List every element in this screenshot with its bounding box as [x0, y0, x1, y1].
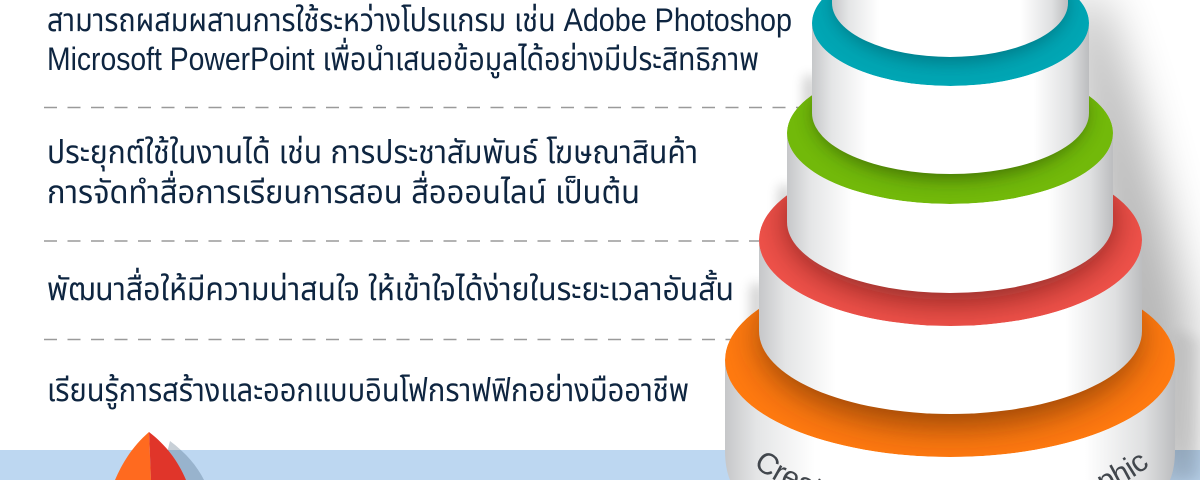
benefit line 4: การจัดทำสื่อการเรียนการสอน สื่อออนไลน์ เป็นต้น	[47, 170, 640, 210]
tier 5 label	[758, 453, 1148, 480]
benefit line 1: สามารถผสมผสานการใช้ระหว่างโปรแกรม เช่น Adobe Photoshop	[47, 2, 792, 38]
benefit line 2: Microsoft PowerPoint เพื่อนำเสนอข้อมูลได้อย่างมีประสิทธิภาพ	[47, 37, 759, 79]
red ring	[759, 194, 1142, 326]
benefit line 3: ประยุกต์ใช้ในงานได้ เช่น การประชาสัมพันธ์ โฆษณาสินค้า	[47, 134, 698, 171]
orange ring	[725, 308, 1175, 457]
tier 3 wall	[787, 133, 1113, 293]
stacked cylinder diagram	[725, 0, 1200, 480]
benefit line 5: พัฒนาสื่อให้มีความน่าสนใจ ให้เข้าใจได้ง่ายในระยะเวลาอันสั้น	[47, 267, 734, 307]
teal ring	[812, 0, 1089, 86]
tier 2 wall	[812, 23, 1089, 174]
sailboat icon	[115, 432, 204, 480]
tier 1 wall	[832, 0, 1068, 57]
text block: list of benefits	[47, 2, 792, 410]
bottom blue band	[0, 450, 1200, 480]
tier 5 wall	[725, 360, 1175, 480]
tier 4 wall	[759, 240, 1142, 414]
green ring	[787, 95, 1113, 204]
soft cast shadow	[1070, 0, 1190, 480]
benefit line 6: เรียนรู้การสร้างและออกแบบอินโฟกราฟฟิกอย่างมืออาชีพ	[47, 372, 689, 410]
